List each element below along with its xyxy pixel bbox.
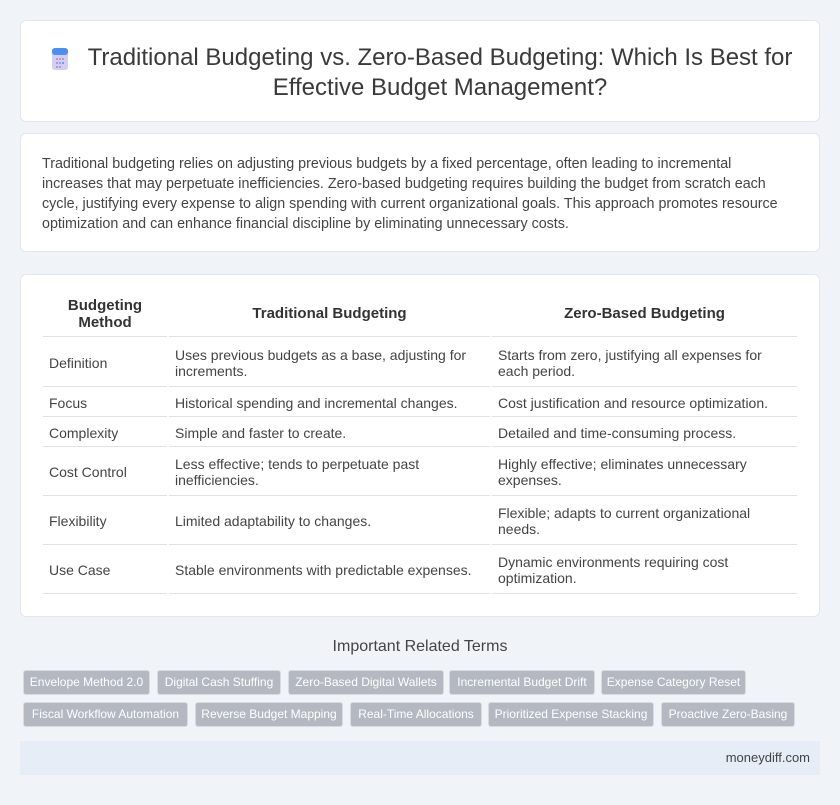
footer source text: moneydiff.com bbox=[726, 750, 810, 765]
comparison table: Dynamic environments requiring cost optimization. bbox=[498, 554, 728, 586]
description text: Traditional budgeting relies on adjusting previous budgets by a fixed percentage, often leading to incremental increases that may perpetuate inefficiencies. Zero-based budgeting requires building the budget from scratch each cycle, justifying every expense to align spending with current organizational goals. This approach promotes resource optimization and can enhance financial discipline by eliminating unnecessary costs. bbox=[42, 156, 778, 232]
comparison table: Historical spending and incremental changes. bbox=[175, 394, 458, 410]
related terms tags: Real-Time Allocations bbox=[358, 707, 474, 721]
comparison table: Budgeting Method bbox=[68, 296, 142, 330]
comparison table: Complexity bbox=[49, 424, 118, 440]
related terms tags: Fiscal Workflow Automation bbox=[32, 707, 179, 721]
related terms tags: Digital Cash Stuffing bbox=[165, 675, 273, 689]
description card bbox=[20, 133, 820, 252]
title: Traditional Budgeting vs. Zero-Based Budgeting: Which Is Best for Effective Budget Management? bbox=[88, 44, 792, 101]
related terms tags: Expense Category Reset bbox=[607, 675, 740, 689]
related terms tags: Zero-Based Digital Wallets bbox=[295, 675, 437, 689]
related terms tags: Prioritized Expense Stacking bbox=[495, 707, 647, 721]
comparison table: Detailed and time-consuming process. bbox=[498, 424, 736, 440]
comparison table: Cost Control bbox=[49, 464, 127, 480]
comparison table: Limited adaptability to changes. bbox=[175, 513, 371, 529]
header card bbox=[20, 20, 820, 122]
comparison table: Definition bbox=[49, 354, 107, 370]
related terms tags: Incremental Budget Drift bbox=[457, 675, 587, 689]
related terms tags: Reverse Budget Mapping bbox=[201, 707, 337, 721]
related terms tags: Envelope Method 2.0 bbox=[30, 675, 143, 689]
comparison table: Focus bbox=[49, 394, 87, 410]
comparison table: Flexibility bbox=[49, 513, 107, 529]
comparison table: Stable environments with predictable expenses. bbox=[175, 562, 472, 578]
comparison table: Highly effective; eliminates unnecessary expenses. bbox=[498, 456, 747, 488]
related terms heading: Important Related Terms bbox=[333, 638, 507, 655]
comparison table: Less effective; tends to perpetuate past inefficiencies. bbox=[175, 456, 419, 488]
comparison table: Uses previous budgets as a base, adjusting for increments. bbox=[175, 346, 466, 378]
comparison table: Starts from zero, justifying all expenses for each period. bbox=[498, 346, 762, 378]
comparison table: Cost justification and resource optimization. bbox=[498, 394, 768, 410]
related terms tags: Proactive Zero-Basing bbox=[669, 707, 787, 721]
comparison table bbox=[43, 296, 797, 594]
icon: calendar bbox=[52, 48, 68, 70]
comparison table: Zero-Based Budgeting bbox=[564, 305, 725, 322]
comparison table card bbox=[20, 274, 820, 617]
comparison table: Flexible; adapts to current organizational needs. bbox=[498, 505, 750, 537]
comparison table: Use Case bbox=[49, 562, 110, 578]
comparison table: Traditional Budgeting bbox=[252, 305, 407, 322]
comparison table: Simple and faster to create. bbox=[175, 424, 346, 440]
footer bbox=[20, 741, 820, 775]
